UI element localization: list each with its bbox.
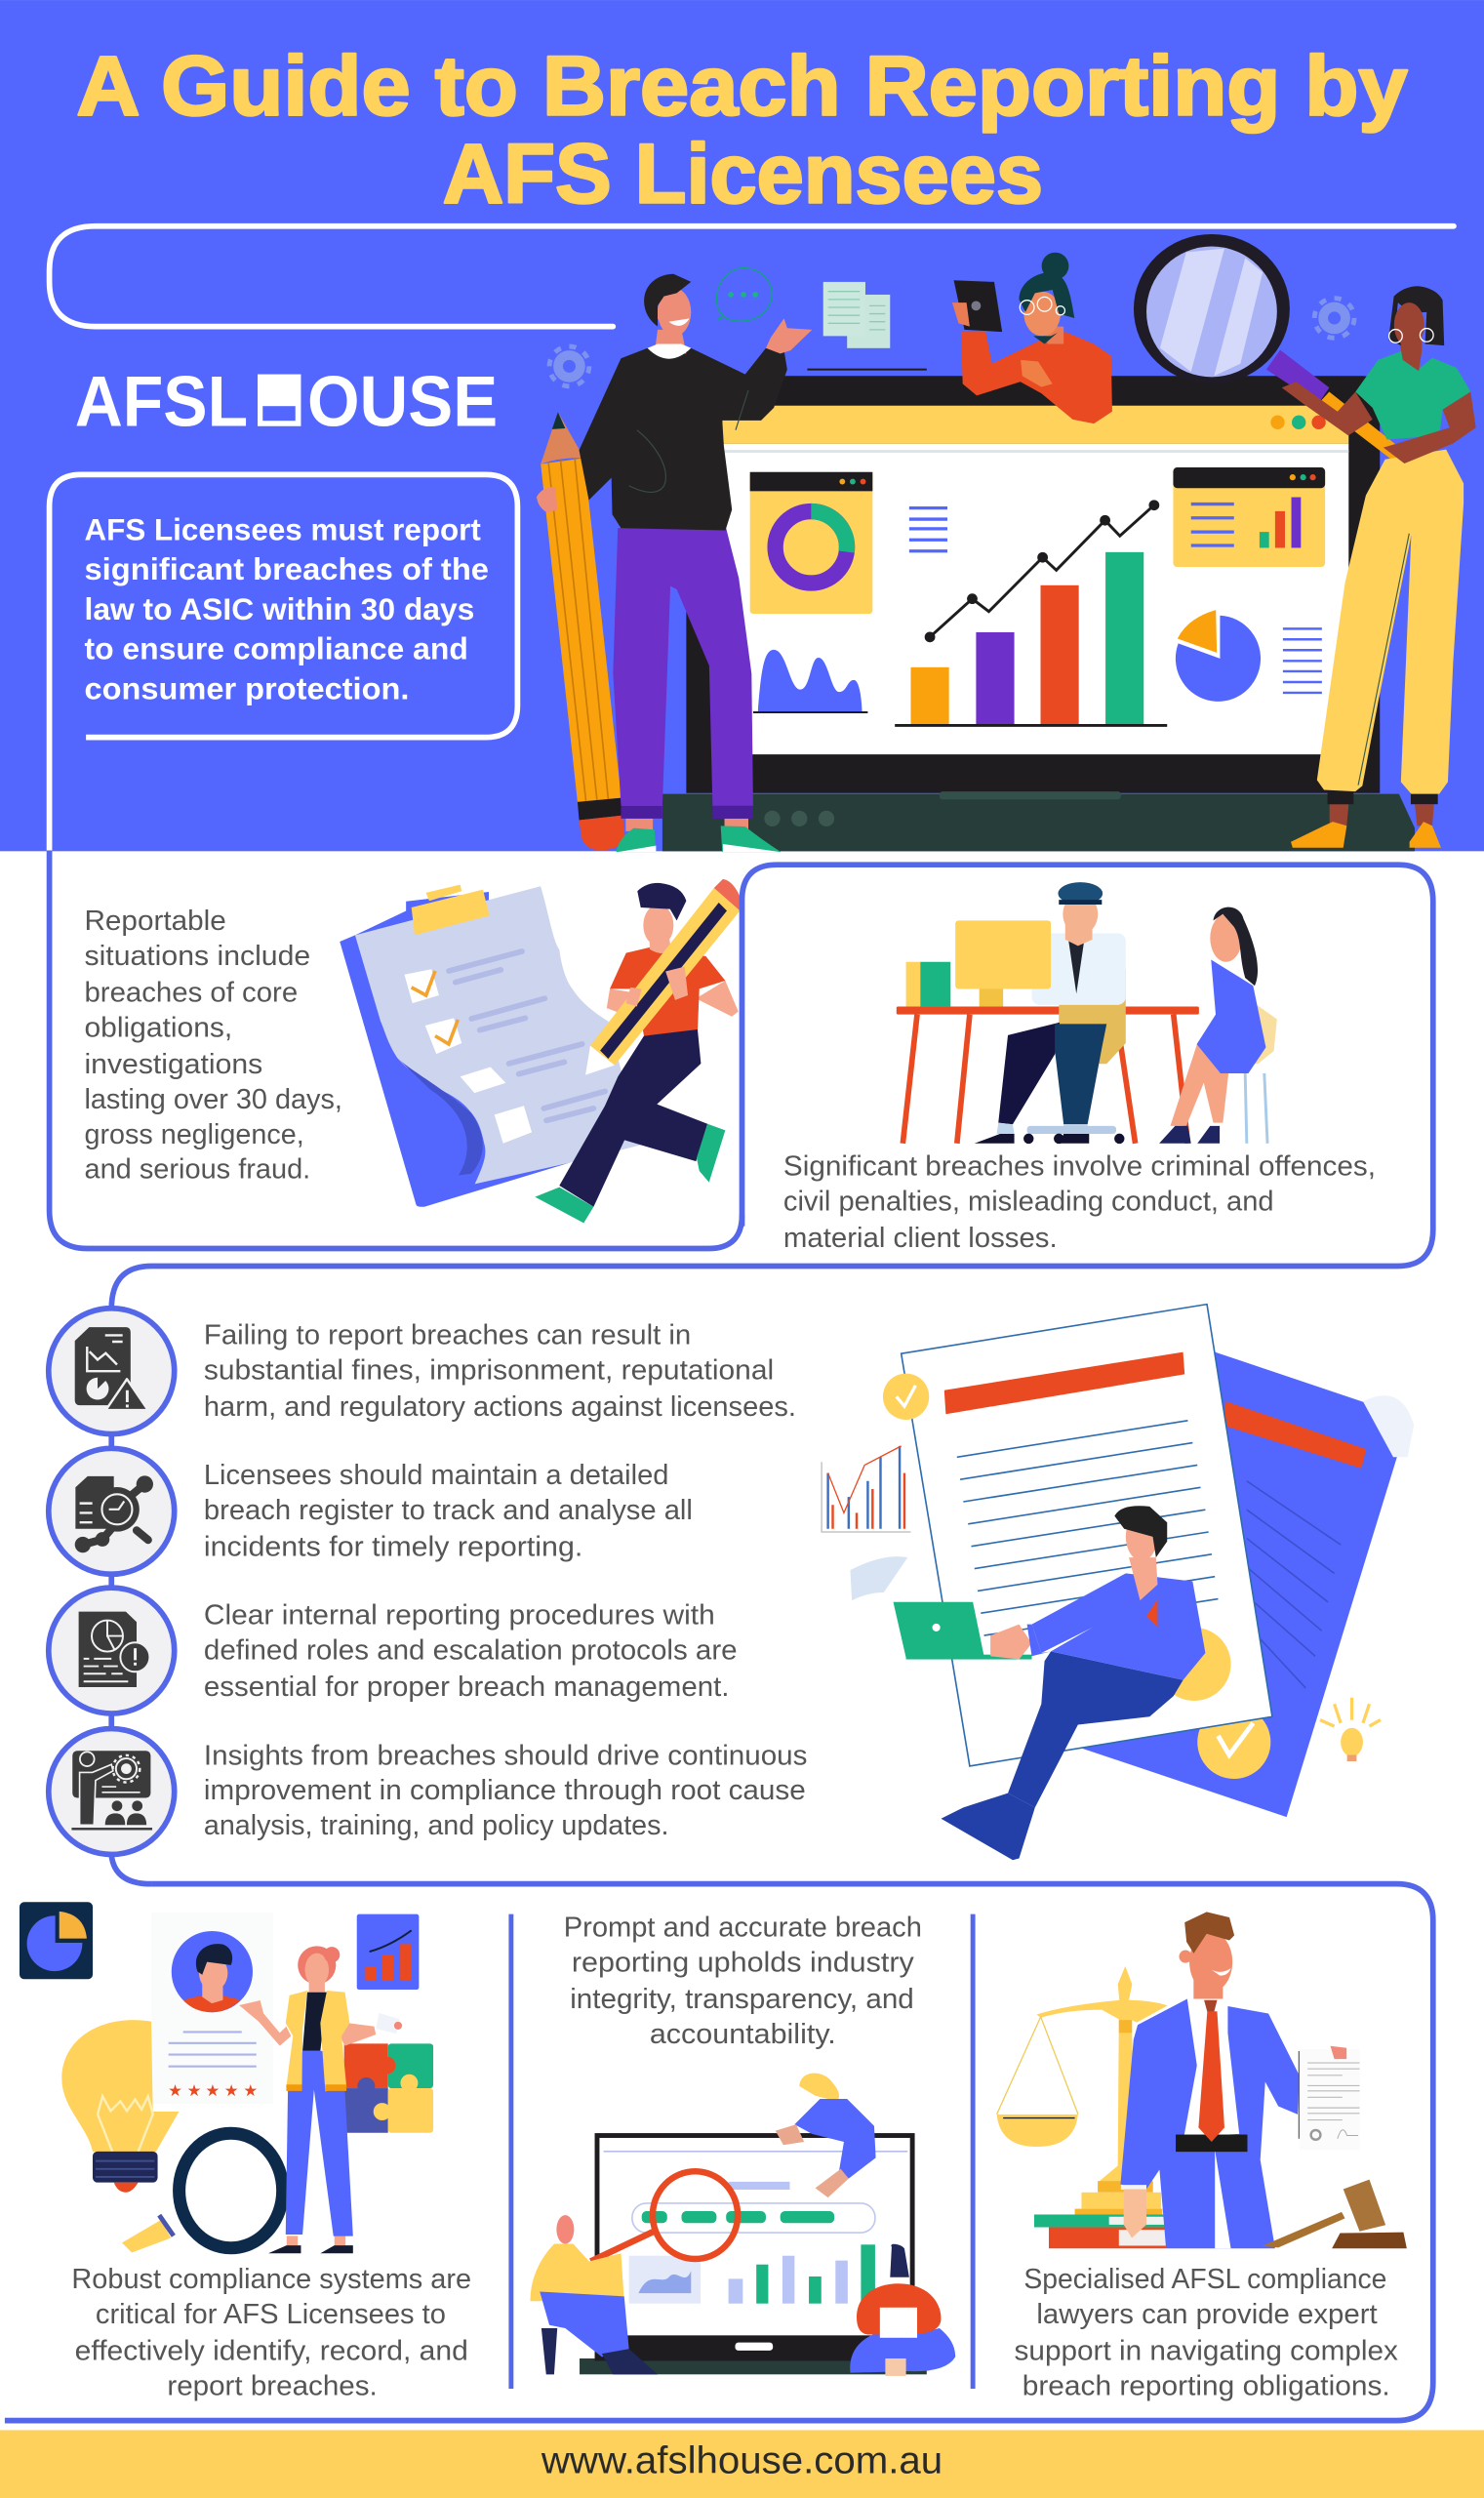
text: specialised lawyers (1015, 2264, 1399, 2402)
text: significant breaches: Significant breaches involve criminal offences, (783, 1150, 1376, 1182)
logo (75, 362, 498, 442)
illustration: clipboard and man (340, 879, 742, 1223)
paper scrap (850, 1556, 907, 1600)
text: failing to report (204, 1319, 796, 1423)
magnifier (122, 2133, 283, 2252)
text: specialised lawyers: Specialised AFSL compliance (1023, 2264, 1386, 2295)
text: significant breaches: material client losses. (783, 1223, 1058, 1254)
text: reportable situations: breaches of core (84, 978, 298, 1009)
icon: light bulb (1320, 1698, 1381, 1761)
list lines (909, 508, 947, 551)
leaning woman (776, 2074, 876, 2197)
documents (807, 282, 927, 370)
panel: intro callout: significant breaches of the (84, 551, 489, 586)
text: prompt reporting: Prompt and accurate breach (564, 1913, 922, 1944)
speech bubble (716, 268, 772, 321)
search ring (590, 2171, 738, 2261)
text: failing to report: harm, and regulatory actions against licensees. (204, 1391, 796, 1423)
police officer (975, 882, 1126, 1144)
text: reportable situations: Reportable (84, 906, 226, 937)
text: prompt reporting (564, 1913, 922, 2050)
icon: register analysis (49, 1448, 175, 1574)
logo: AFSL (75, 362, 248, 442)
woman presenting (239, 1946, 402, 2253)
text: breach register: incidents for timely reporting. (204, 1531, 582, 1562)
logo: OUSE (307, 362, 498, 442)
text: breach register: breach register to track and analyse all (204, 1495, 693, 1526)
text: continuous improvement (204, 1740, 807, 1841)
seated man (941, 1506, 1205, 1860)
footer bar: www.afslhouse.com.au (541, 2439, 943, 2481)
panel: reportable situations (50, 851, 742, 1249)
illustration: documents and seated man (822, 1305, 1414, 1860)
text: reportable situations (84, 906, 342, 1186)
illustration: lawyer with scales (997, 1912, 1407, 2248)
man (580, 274, 812, 852)
panel: intro callout: to ensure compliance and (84, 631, 468, 666)
seated woman with laptop (850, 2244, 955, 2376)
text: reportable situations: investigations (84, 1049, 262, 1080)
laptop screen (580, 2136, 927, 2374)
text: specialised lawyers: lawyers can provide expert (1036, 2299, 1378, 2330)
text: reportable situations: situations include (84, 941, 310, 972)
list lines right (1283, 628, 1322, 693)
hand (766, 318, 812, 353)
text: failing to report: substantial fines, imprisonment, reputational (204, 1354, 774, 1386)
illustration: screen and searchers (530, 2074, 955, 2376)
text: significant breaches (783, 1150, 1376, 1254)
text: compliance systems (71, 2264, 471, 2402)
text: breach register (204, 1460, 693, 1562)
illustration: officer at desk (897, 882, 1277, 1144)
pencil (537, 412, 625, 851)
small bar chart (822, 1446, 910, 1532)
profile card (151, 1913, 273, 2104)
text: compliance systems: Robust compliance systems are (71, 2264, 471, 2295)
text: prompt reporting: accountability. (650, 2019, 836, 2050)
pie chart (1176, 610, 1261, 702)
chart tile (357, 1914, 419, 1990)
panel: intro callout: AFS Licensees must report (84, 511, 481, 546)
icon: report with warning (49, 1309, 175, 1434)
books (1034, 2214, 1166, 2248)
head (644, 274, 691, 336)
text: internal procedures: essential for proper breach management. (204, 1672, 729, 1703)
panel: bottom frame (5, 1884, 1433, 2421)
lawyer (1120, 1912, 1300, 2248)
icon: procedures document (49, 1588, 175, 1713)
icon: gear right (1314, 299, 1354, 338)
panel: intro callout: consumer protection. (84, 670, 409, 705)
text: compliance systems: report breaches. (167, 2371, 378, 2402)
text: internal procedures (204, 1600, 738, 1703)
back document (1078, 1352, 1414, 1817)
header background (0, 0, 1484, 851)
text: significant breaches: civil penalties, misleading conduct, and (783, 1186, 1274, 1217)
card: donut chart (750, 472, 872, 614)
hero illustration (537, 234, 1476, 852)
divider lines (511, 1914, 973, 2389)
text: internal procedures: Clear internal reporting procedures with (204, 1600, 715, 1632)
bar chart (895, 500, 1167, 725)
yellow check badge (1197, 1706, 1270, 1779)
text: failing to report: Failing to report breaches can result in (204, 1319, 691, 1350)
text: internal procedures: defined roles and escalation protocols are (204, 1635, 738, 1667)
profile card: ★★★★★ (168, 2082, 258, 2100)
desk (897, 1006, 1199, 1144)
text: reportable situations: obligations, (84, 1012, 232, 1043)
icon: presenter training (49, 1729, 175, 1854)
title (76, 40, 1408, 221)
title: A Guide to Breach Reporting by (76, 40, 1408, 134)
panel: intro callout (50, 474, 517, 851)
running man (535, 879, 742, 1223)
gavel (1263, 2180, 1407, 2248)
footer bar (0, 2430, 1484, 2498)
text: compliance systems: effectively identify, record, and (75, 2336, 468, 2367)
text: continuous improvement: improvement in compliance through root cause (204, 1775, 806, 1806)
icon: gear left (549, 346, 589, 386)
woman with tablet (952, 253, 1112, 423)
header outline (50, 226, 1454, 327)
title: AFS Licensees (443, 127, 1043, 221)
man with magnifier (530, 2215, 658, 2374)
timeline connector (111, 1433, 151, 1884)
paper (1299, 2046, 1360, 2150)
text: reportable situations: gross negligence, (84, 1119, 304, 1150)
client woman (1159, 907, 1277, 1144)
text: specialised lawyers: breach reporting obligations. (1023, 2371, 1390, 2402)
light bulb (61, 2020, 179, 2193)
magnifying glass (1134, 234, 1432, 485)
area chart (753, 650, 867, 712)
monitor and binders (906, 920, 1051, 1006)
clipboard (340, 885, 641, 1207)
text: reportable situations: lasting over 30 days, (84, 1084, 342, 1115)
text: prompt reporting: reporting upholds industry (572, 1947, 914, 1978)
woman with magnifier (1282, 286, 1476, 848)
puzzle (344, 2043, 433, 2133)
laptop (894, 1602, 1032, 1660)
front document (883, 1305, 1272, 1766)
monitor (662, 376, 1415, 851)
text: continuous improvement: Insights from breaches should drive continuous (204, 1740, 807, 1771)
text: compliance systems: critical for AFS Licensees to (96, 2299, 446, 2330)
text: prompt reporting: integrity, transparency, and (570, 1984, 914, 2015)
icon: pie chart tile (20, 1902, 93, 1979)
black sweater (580, 330, 787, 530)
text: continuous improvement: analysis, training, and policy updates. (204, 1810, 668, 1841)
panel: significant breaches (111, 865, 1433, 1309)
text: specialised lawyers: support in navigating complex (1015, 2336, 1399, 2367)
purple trousers (613, 526, 781, 852)
illustration: compliance systems (20, 1902, 433, 2253)
panel: intro callout: law to ASIC within 30 days (84, 591, 474, 626)
scales (997, 1966, 1168, 2214)
card: list and bars (1173, 467, 1325, 567)
text: reportable situations: and serious fraud. (84, 1154, 310, 1186)
text: breach register: Licensees should maintain a detailed (204, 1460, 668, 1491)
